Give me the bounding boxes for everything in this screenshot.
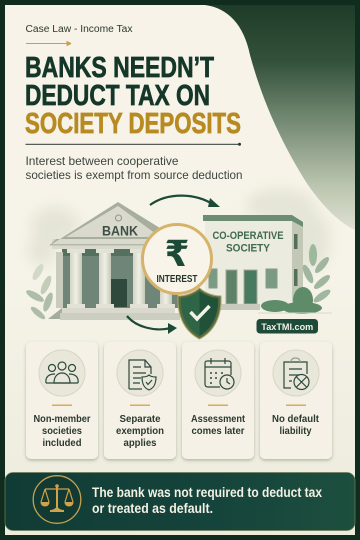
card: separate exemption: Separate bbox=[120, 413, 161, 425]
icon: document with shield bbox=[129, 360, 156, 390]
plant: right bbox=[258, 244, 332, 314]
bank label: BANK bbox=[102, 224, 138, 238]
card: no default liability: No default bbox=[272, 413, 319, 425]
title: DEDUCT TAX ON bbox=[25, 80, 210, 112]
watermark badge: TaxTMI.com bbox=[261, 322, 313, 333]
building: society bbox=[203, 215, 303, 310]
card: non-member societies: societies bbox=[42, 425, 82, 437]
background foliage haze bbox=[28, 189, 330, 270]
icon: calendar with clock bbox=[205, 358, 234, 389]
shield with check bbox=[178, 288, 221, 339]
society label: SOCIETY bbox=[226, 242, 271, 254]
subtitle: societies is exempt from source deduction bbox=[26, 168, 242, 182]
card: non-member societies: Non-member bbox=[34, 413, 90, 425]
card: assessment later bbox=[182, 342, 254, 459]
icon: scales of justice bbox=[33, 476, 81, 523]
conclusion text: or treated as default. bbox=[92, 501, 213, 516]
interest label: INTEREST bbox=[156, 274, 198, 285]
society label bbox=[212, 230, 284, 254]
title divider bbox=[26, 143, 241, 146]
card: separate exemption: applies bbox=[124, 437, 157, 449]
subtitle bbox=[26, 154, 242, 182]
society label: CO-OPERATIVE bbox=[212, 230, 284, 242]
icon: people bbox=[46, 362, 78, 383]
rupee symbol: ₹ bbox=[164, 234, 190, 275]
interest medallion bbox=[142, 224, 212, 294]
card: non-member societies bbox=[26, 342, 98, 459]
building: bank bbox=[48, 202, 180, 320]
card: assessment later: comes later bbox=[192, 425, 244, 437]
watermark badge bbox=[256, 319, 318, 334]
title: BANKS NEEDN’T bbox=[25, 52, 214, 84]
title: SOCIETY DEPOSITS bbox=[25, 108, 241, 140]
subtitle: Interest between cooperative bbox=[26, 154, 179, 168]
card: assessment later: Assessment bbox=[191, 413, 245, 425]
entablature bbox=[52, 239, 174, 249]
card: no default liability bbox=[260, 342, 332, 459]
windows and doors bbox=[226, 270, 237, 304]
arrow: top curved bbox=[150, 196, 220, 207]
arrow: gold accent bbox=[26, 42, 71, 46]
columns bbox=[56, 249, 175, 308]
conclusion banner bbox=[5, 472, 355, 530]
card: separate exemption: exemption bbox=[116, 425, 164, 437]
card: separate exemption bbox=[104, 342, 176, 459]
eyebrow: case law: Case Law - Income Tax bbox=[26, 24, 132, 35]
title bbox=[25, 52, 241, 140]
plant: left bbox=[25, 262, 55, 321]
conclusion text bbox=[92, 485, 322, 516]
door bbox=[110, 279, 127, 307]
card: non-member societies: included bbox=[42, 437, 82, 449]
arrow: lower curved bbox=[127, 316, 177, 334]
steps bbox=[48, 308, 175, 319]
icon: clipboard with cross bbox=[284, 358, 309, 390]
card: no default liability: liability bbox=[280, 425, 312, 437]
pediment bbox=[49, 202, 168, 246]
conclusion text: The bank was not required to deduct tax bbox=[92, 485, 322, 500]
